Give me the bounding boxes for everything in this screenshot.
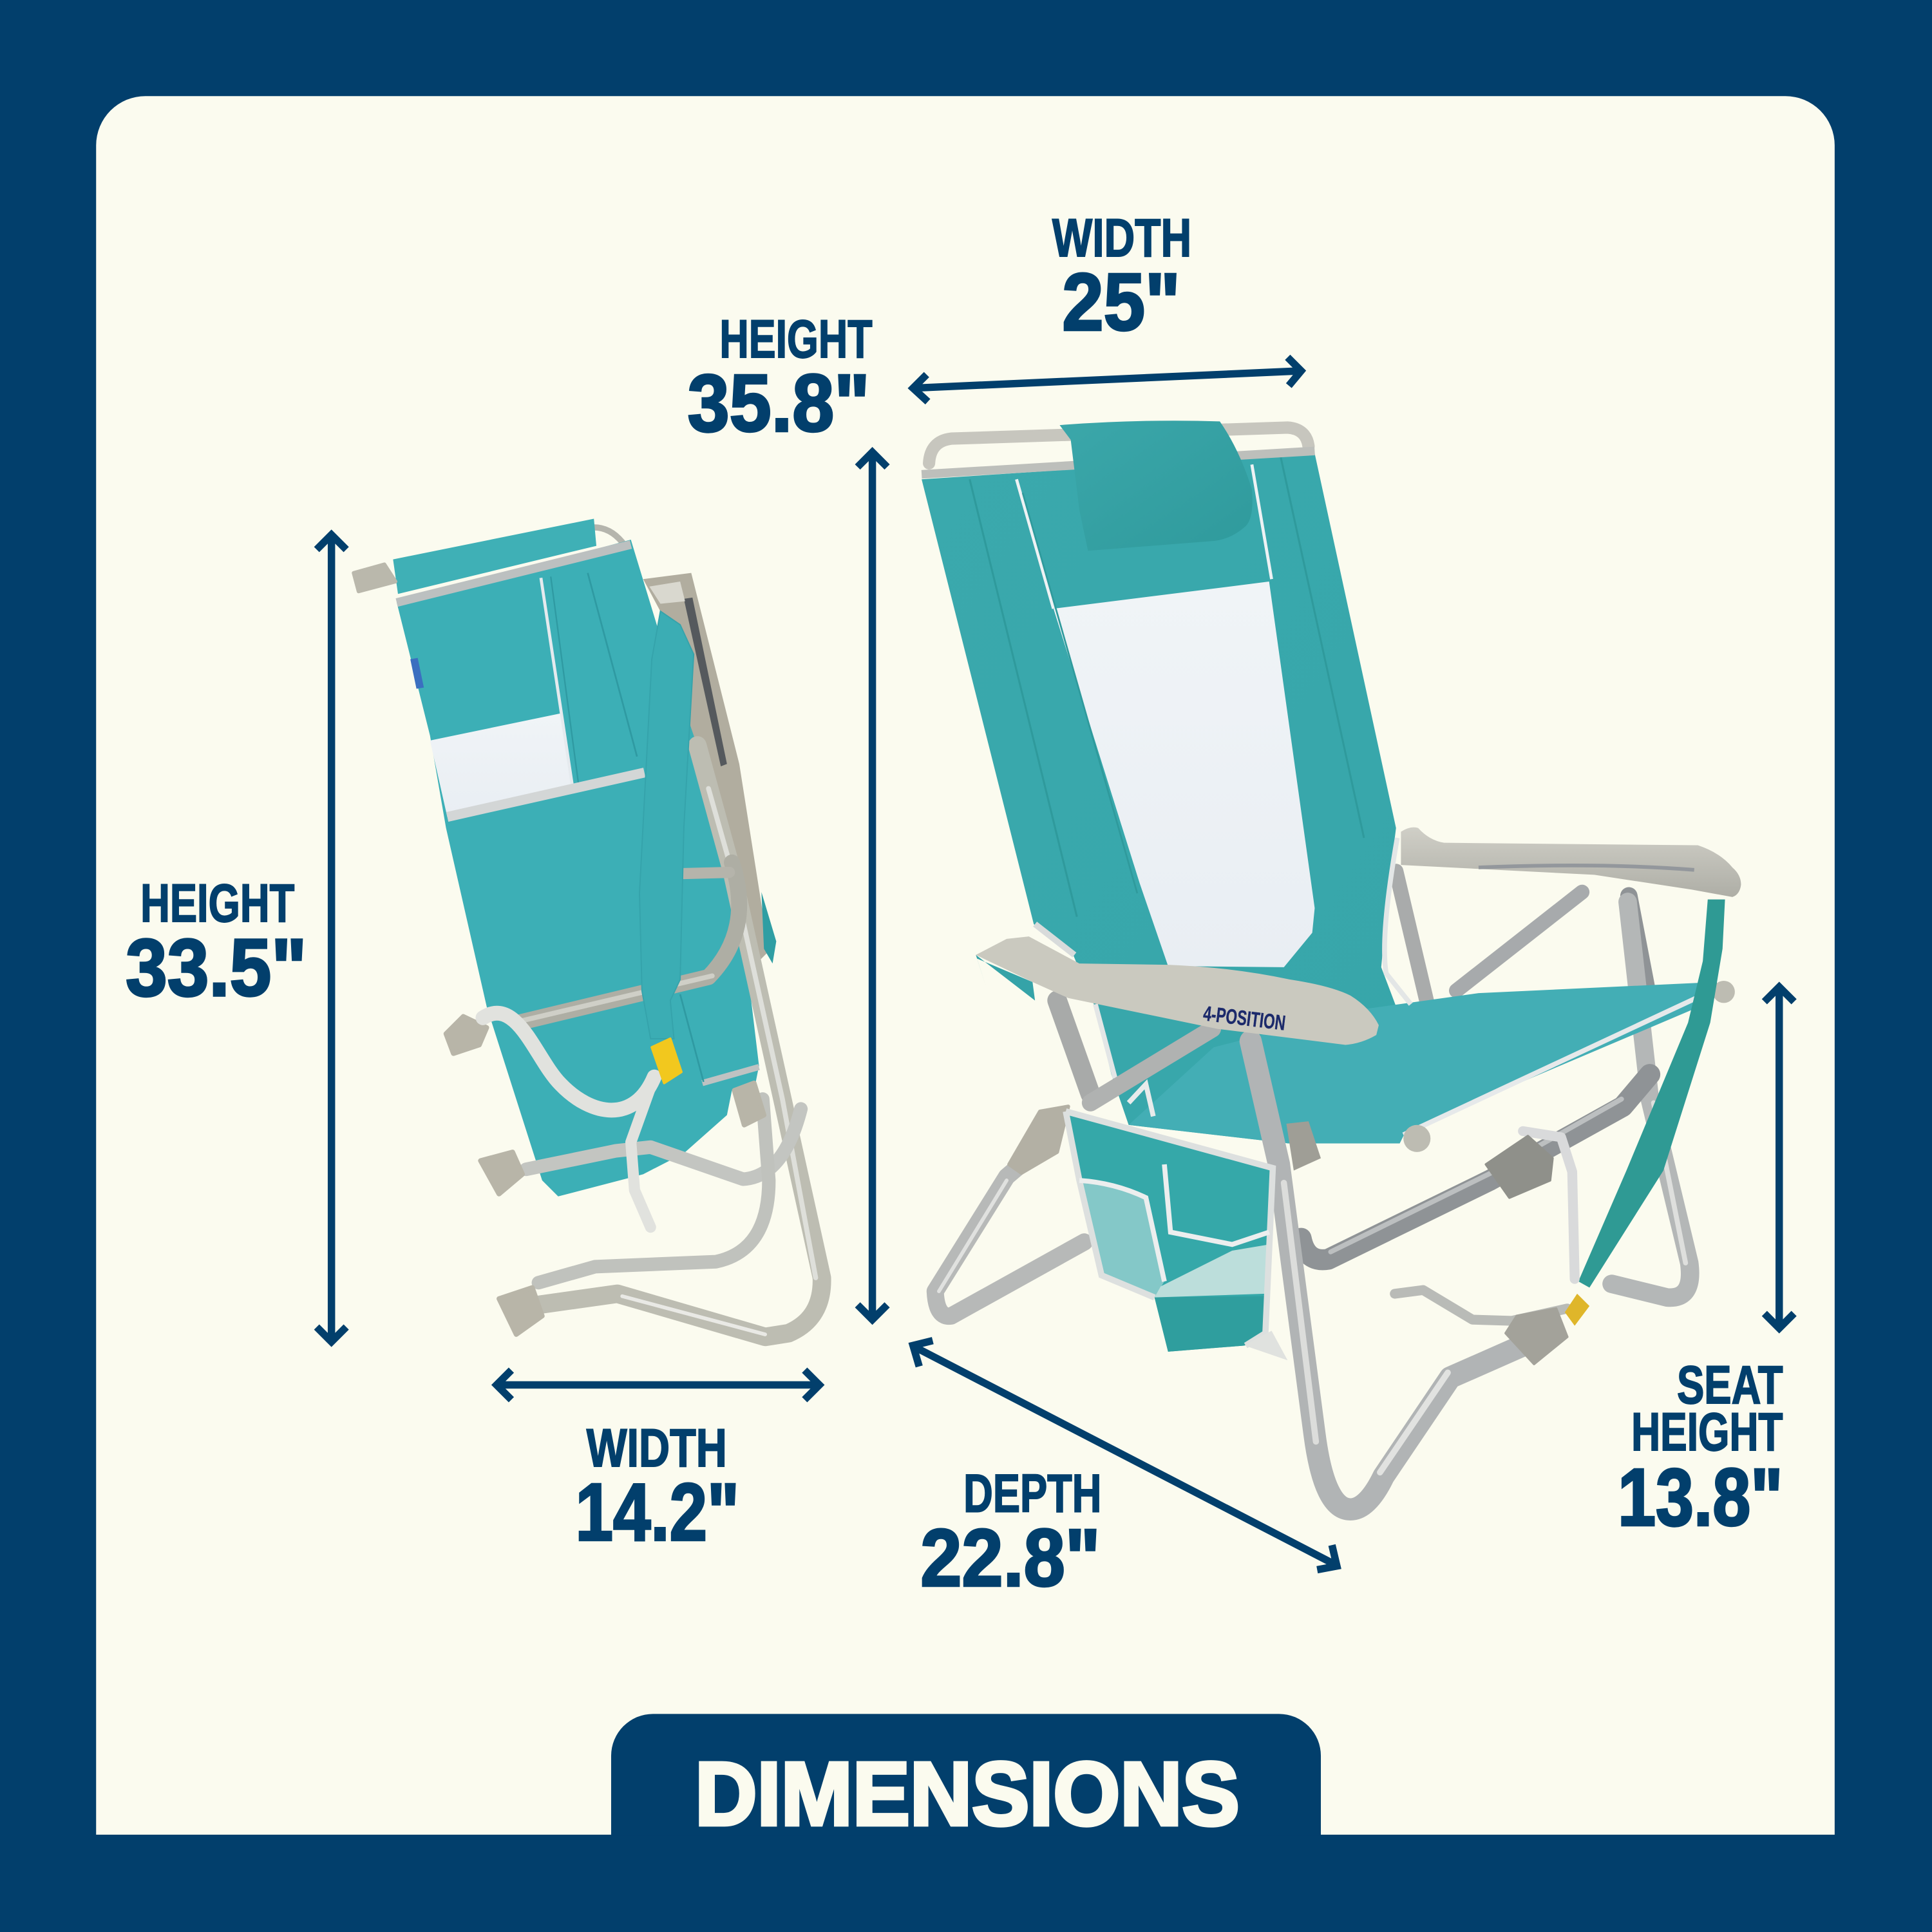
open chair headrest [1059,421,1253,551]
label: height 33.5: 33.5" [126,922,307,1013]
open chair far frame [1301,871,1690,1298]
label: height 35.8: HEIGHT [719,309,873,369]
folded chair tubes [518,746,822,1337]
label: width 25: WIDTH [1052,208,1191,268]
label: seat height 13.8 [1618,1355,1783,1543]
open chair backrest fabric [922,453,1399,1144]
far armrest [1401,828,1741,897]
cup holder [1066,1112,1287,1360]
seat pivot bracket [1286,1121,1321,1171]
folded chair tag [410,658,424,689]
arrow: height open chair [858,452,887,1320]
open chair mesh panel [1054,582,1314,967]
label: width 14.2: 14.2" [575,1467,739,1558]
label: width 14.2 [575,1418,739,1558]
strap connectors [1486,1136,1589,1364]
folded chair frame behind fabric [594,527,776,963]
label: seat height 13.8: HEIGHT [1631,1402,1783,1462]
folded chair stitching [397,545,759,1083]
title tab [611,1714,1321,1844]
folded chair main fabric [397,540,759,1197]
arrow: seat height [1765,987,1794,1328]
folded chair shoulder pad [639,611,694,1039]
near armrest [976,936,1379,1045]
open chair seat caps [1403,981,1735,1152]
open chair top binding [922,451,1314,475]
label: seat height 13.8: SEAT [1677,1355,1783,1415]
label: width 14.2: WIDTH [587,1418,727,1478]
arrow: width open chair [913,357,1301,402]
open chair top tube [929,428,1309,463]
label: height 33.5 [126,873,307,1013]
title: DIMENSIONS [695,1744,1240,1844]
label: depth 22.8 [920,1464,1101,1603]
folded chair white strap [483,1013,654,1227]
label: depth 22.8: 22.8" [920,1512,1101,1603]
label: height 33.5: HEIGHT [140,873,294,933]
folded chair feet [446,1016,764,1334]
label: width 25: 25" [1062,257,1180,348]
label: depth 22.8: DEPTH [963,1464,1101,1524]
label: width 25 [1052,208,1191,348]
label: height 35.8 [688,309,873,449]
open chair seat white edge [1403,987,1720,1135]
panel: folded chair [354,518,822,1337]
arrow: width folded chair [497,1370,819,1399]
label: height 35.8: 35.8" [688,358,870,449]
open chair stitching and piping [970,455,1411,1116]
folded chair mesh window [430,714,572,817]
arrow: depth [913,1341,1337,1570]
arrow: height folded chair [317,535,346,1342]
open chair leg bracket [1009,1106,1068,1173]
white straps [1395,1131,1575,1321]
folded chair tube tip [354,564,395,591]
folded chair back flap [393,518,596,594]
open chair front frame [935,1001,1523,1510]
4-position label: 4-POSITION [1202,1001,1287,1035]
panel: open chair [922,421,1741,1510]
teal strap [1578,900,1725,1287]
label: seat height 13.8: 13.8" [1618,1452,1783,1543]
open chair seat fabric [1129,982,1721,1144]
icon: yellow buckle [652,1039,681,1083]
